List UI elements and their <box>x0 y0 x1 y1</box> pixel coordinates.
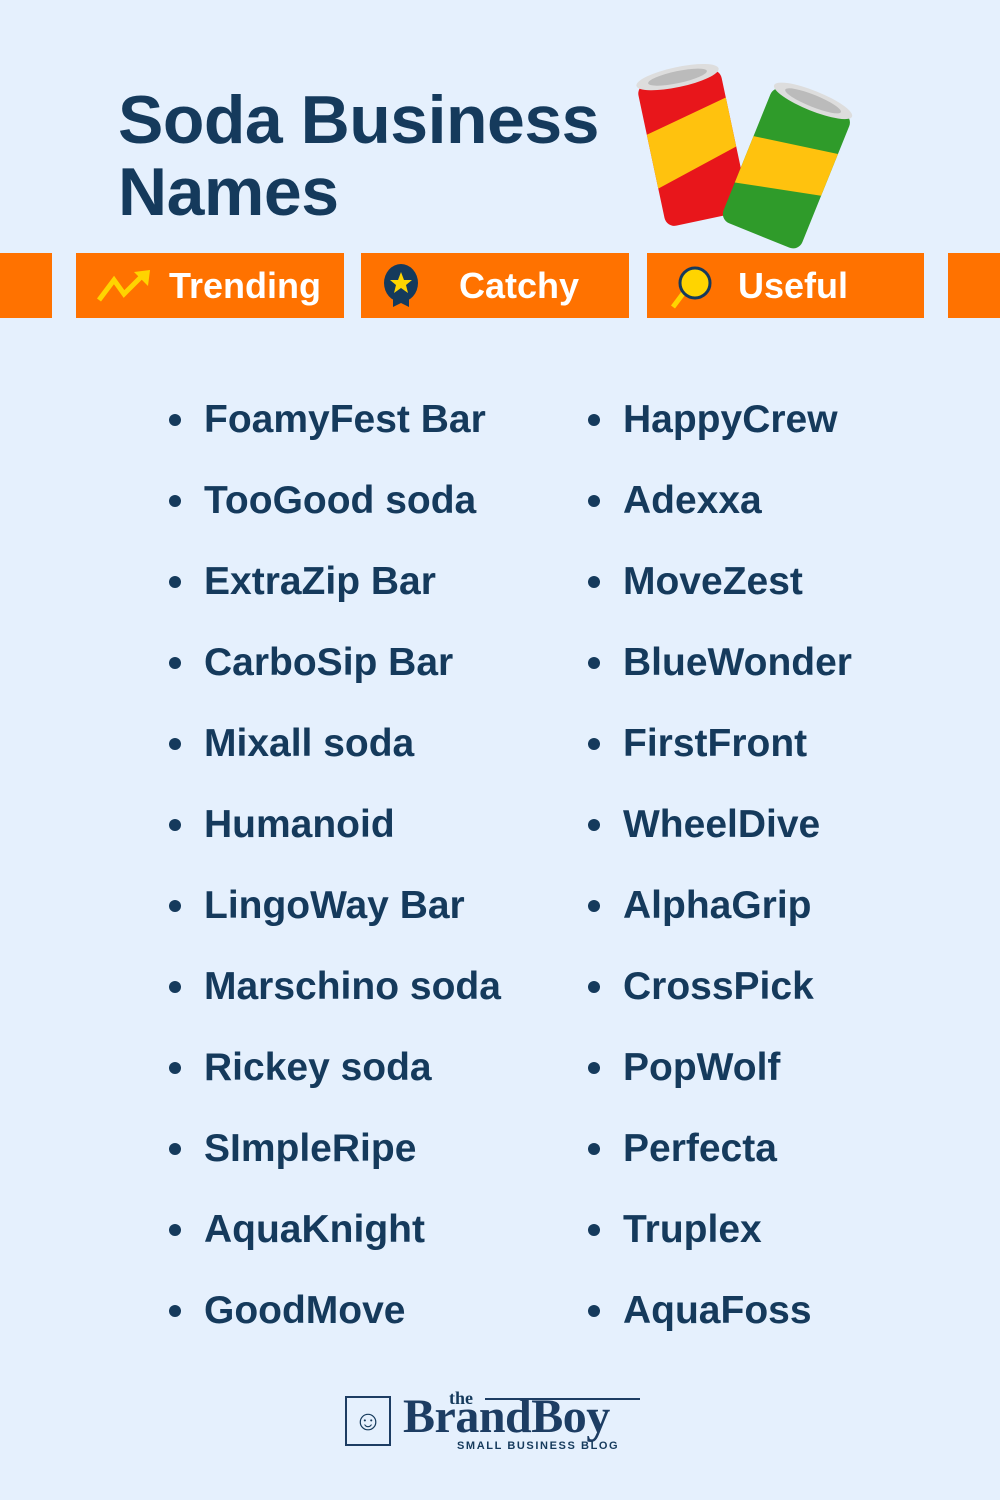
list: left column: Humanoid <box>204 803 395 846</box>
list: left column: AquaKnight <box>204 1208 425 1251</box>
title: Soda Business <box>118 82 599 158</box>
logo: the <box>449 1388 473 1408</box>
list: left column: CarboSip Bar <box>204 641 453 684</box>
logo <box>345 1388 640 1452</box>
list: right column: Truplex <box>623 1208 762 1251</box>
title <box>118 82 599 230</box>
tab: useful: Useful <box>738 265 848 306</box>
tab: catchy: Catchy <box>459 265 579 306</box>
list: right column: AquaFoss <box>623 1289 812 1332</box>
list: right column: AlphaGrip <box>623 884 812 927</box>
tab: trending <box>76 253 344 318</box>
list: left column: Mixall soda <box>204 722 414 765</box>
list: right column: WheelDive <box>623 803 820 846</box>
list: right column: HappyCrew <box>623 398 838 441</box>
list: right column <box>588 398 852 1332</box>
list: left column: Rickey soda <box>204 1046 432 1089</box>
list: left column: LingoWay Bar <box>204 884 465 927</box>
list: right column: CrossPick <box>623 965 814 1008</box>
list: right column: BlueWonder <box>623 641 852 684</box>
list: right column: FirstFront <box>623 722 807 765</box>
list: left column: Marschino soda <box>204 965 501 1008</box>
logo: ☺ <box>354 1405 382 1436</box>
list: right column: PopWolf <box>623 1046 780 1089</box>
logo: BrandBoy <box>403 1390 610 1443</box>
list: left column <box>169 398 502 1332</box>
list: right column: Perfecta <box>623 1127 777 1170</box>
tab: catchy <box>361 253 629 318</box>
list: right column: Adexxa <box>623 479 762 522</box>
logo: SMALL BUSINESS BLOG <box>457 1440 619 1452</box>
list: left column: SImpleRipe <box>204 1127 416 1170</box>
tab: trending: Trending <box>169 265 321 306</box>
list: left column: FoamyFest Bar <box>204 398 486 441</box>
tab: useful <box>647 253 924 318</box>
icon: soda cans <box>636 64 852 248</box>
list: right column: MoveZest <box>623 560 803 603</box>
list: left column: ExtraZip Bar <box>204 560 436 603</box>
list: left column: TooGood soda <box>204 479 476 522</box>
tab bar <box>0 253 1000 318</box>
list: left column: GoodMove <box>204 1289 406 1332</box>
title: Names <box>118 154 339 230</box>
